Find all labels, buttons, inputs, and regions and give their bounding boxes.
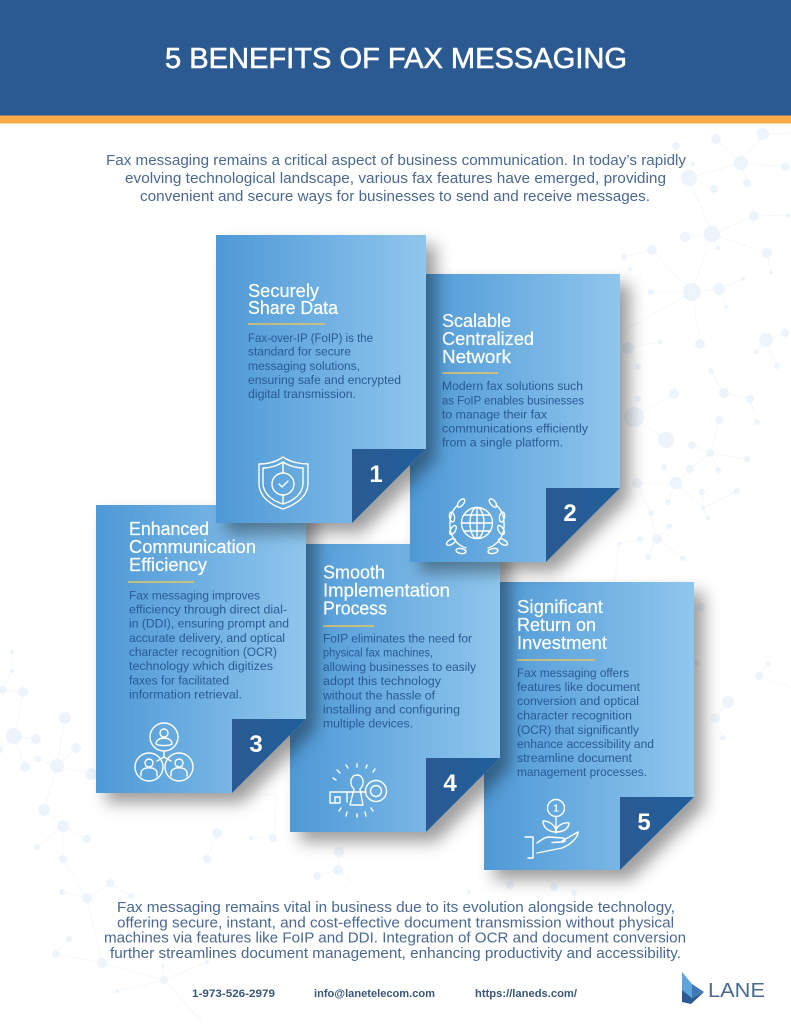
icon: hand with growing coin bbox=[525, 800, 578, 858]
card 4: Smooth Implementation Process: FoIP eliminates the need for bbox=[323, 632, 472, 646]
icon: globe with laurels bbox=[445, 498, 509, 554]
card 4: Smooth Implementation Process: Process bbox=[323, 599, 387, 619]
logo: LANE: LANE bbox=[708, 979, 765, 1002]
card 3: Enhanced Communication Efficiency: in (DDI), ensuring prompt and bbox=[129, 617, 289, 631]
card 2: Scalable Centralized Network: Scalable bbox=[442, 311, 511, 331]
card 1: Securely Share Data: standard for secure bbox=[248, 344, 351, 358]
closing paragraph bbox=[104, 899, 686, 962]
card 4: Smooth Implementation Process bbox=[290, 544, 500, 832]
card 3: Enhanced Communication Efficiency bbox=[96, 505, 306, 793]
closing paragraph: further streamlines document management, enhancing productivity and accessibility. bbox=[110, 945, 681, 962]
card 4: Smooth Implementation Process: allowing businesses to easily bbox=[323, 660, 477, 674]
card 2: Scalable Centralized Network: communications efficiently bbox=[442, 422, 589, 436]
card 5: Significant Return on Investment: (OCR) that significantly bbox=[517, 723, 640, 737]
card 2: Scalable Centralized Network: Modern fax solutions such bbox=[442, 379, 583, 393]
card 3: Enhanced Communication Efficiency: technology which digitizes bbox=[129, 659, 273, 673]
intro paragraph: Fax messaging remains a critical aspect of business communication. In today’s rapidly bbox=[106, 152, 687, 169]
card 1: Securely Share Data: Share Data bbox=[248, 298, 339, 318]
card 3: Enhanced Communication Efficiency: Efficiency bbox=[129, 555, 207, 575]
card 3: Enhanced Communication Efficiency: character recognition (OCR) bbox=[129, 645, 277, 659]
card 5: Significant Return on Investment: 5 bbox=[637, 809, 651, 836]
card 2: Scalable Centralized Network: as FoIP enables businesses bbox=[442, 393, 584, 407]
contact details: info@lanetelecom.com bbox=[314, 988, 435, 1000]
contact details: https://laneds.com/ bbox=[475, 988, 577, 1000]
logo: LANE bbox=[682, 972, 765, 1004]
card 4: Smooth Implementation Process: 4 bbox=[443, 770, 457, 797]
card 4: Smooth Implementation Process: without the hassle of bbox=[322, 688, 436, 702]
icon: connected people bbox=[135, 723, 193, 781]
card 3: Enhanced Communication Efficiency: accurate delivery, and optical bbox=[129, 631, 285, 645]
card 5: Significant Return on Investment: Return on bbox=[517, 615, 596, 635]
title: 5 BENEFITS OF FAX MESSAGING bbox=[165, 43, 627, 75]
card 5: Significant Return on Investment bbox=[484, 582, 694, 870]
card 2: Scalable Centralized Network bbox=[410, 274, 620, 562]
orange accent stripe bbox=[0, 116, 791, 124]
closing paragraph: machines via features like FoIP and DDI. Integration of OCR and document conversion bbox=[104, 930, 686, 947]
card 5: Significant Return on Investment: Significant bbox=[517, 597, 603, 617]
card 3: Enhanced Communication Efficiency: efficiency through direct dial- bbox=[129, 602, 287, 616]
card 4: Smooth Implementation Process: Smooth bbox=[323, 563, 385, 583]
card 1: Securely Share Data: Securely bbox=[248, 281, 319, 301]
card 2: Scalable Centralized Network: to manage their fax bbox=[442, 408, 548, 422]
card 3: Enhanced Communication Efficiency: Communication bbox=[129, 537, 256, 557]
card 2: Scalable Centralized Network: Network bbox=[442, 347, 512, 367]
intro paragraph: convenient and secure ways for businesses to send and receive messages. bbox=[140, 188, 650, 205]
header band bbox=[0, 0, 791, 116]
card 5: Significant Return on Investment: Fax messaging offers bbox=[517, 666, 629, 680]
card 3: Enhanced Communication Efficiency: information retrieval. bbox=[129, 688, 242, 702]
card 3: Enhanced Communication Efficiency: Enhanced bbox=[129, 519, 209, 539]
card 5: Significant Return on Investment: Investment bbox=[517, 633, 607, 653]
card 1: Securely Share Data: 1 bbox=[369, 461, 383, 488]
icon: security shield bbox=[259, 457, 308, 509]
card 3: Enhanced Communication Efficiency: faxes for facilitated bbox=[129, 673, 229, 687]
card 4: Smooth Implementation Process: multiple devices. bbox=[323, 717, 413, 731]
card 5: Significant Return on Investment: features like document bbox=[517, 680, 641, 694]
closing paragraph: Fax messaging remains vital in business due to its evolution alongside technology, bbox=[117, 899, 675, 916]
card 4: Smooth Implementation Process: physical fax machines, bbox=[323, 646, 433, 660]
card 5: Significant Return on Investment: management processes. bbox=[517, 765, 647, 779]
card 2: Scalable Centralized Network: 2 bbox=[563, 500, 577, 527]
card 1: Securely Share Data: Fax-over-IP (FoIP) is the bbox=[248, 331, 373, 345]
contact details: 1-973-526-2979 bbox=[192, 988, 275, 1000]
card 1: Securely Share Data: digital transmission. bbox=[248, 387, 356, 401]
icon: key and keyhole bbox=[330, 764, 386, 817]
card 3: Enhanced Communication Efficiency: 3 bbox=[249, 731, 263, 758]
card 1: Securely Share Data: ensuring safe and encrypted bbox=[248, 373, 401, 387]
card 4: Smooth Implementation Process: adopt this technology bbox=[323, 674, 442, 688]
card 5: Significant Return on Investment: streamline document bbox=[517, 751, 633, 765]
icon: hand with growing coin: 1 bbox=[553, 804, 559, 814]
intro paragraph bbox=[106, 152, 687, 205]
card 4: Smooth Implementation Process: installing and configuring bbox=[323, 703, 460, 717]
card 5: Significant Return on Investment: conversion and optical bbox=[517, 694, 639, 708]
card 5: Significant Return on Investment: character recognition bbox=[517, 708, 632, 722]
intro paragraph: evolving technological landscape, various fax features have emerged, providing bbox=[125, 170, 666, 187]
card 2: Scalable Centralized Network: from a single platform. bbox=[442, 436, 563, 450]
card 5: Significant Return on Investment: enhance accessibility and bbox=[517, 737, 654, 751]
closing paragraph: offering secure, instant, and cost-effective document transmission without physical bbox=[117, 915, 674, 932]
contact details bbox=[192, 988, 577, 1000]
card 4: Smooth Implementation Process: Implementation bbox=[323, 581, 450, 601]
card 3: Enhanced Communication Efficiency: Fax messaging improves bbox=[129, 588, 260, 602]
card 1: Securely Share Data: messaging solutions, bbox=[248, 359, 360, 373]
card 1: Securely Share Data bbox=[216, 235, 426, 523]
card 2: Scalable Centralized Network: Centralized bbox=[442, 329, 534, 349]
